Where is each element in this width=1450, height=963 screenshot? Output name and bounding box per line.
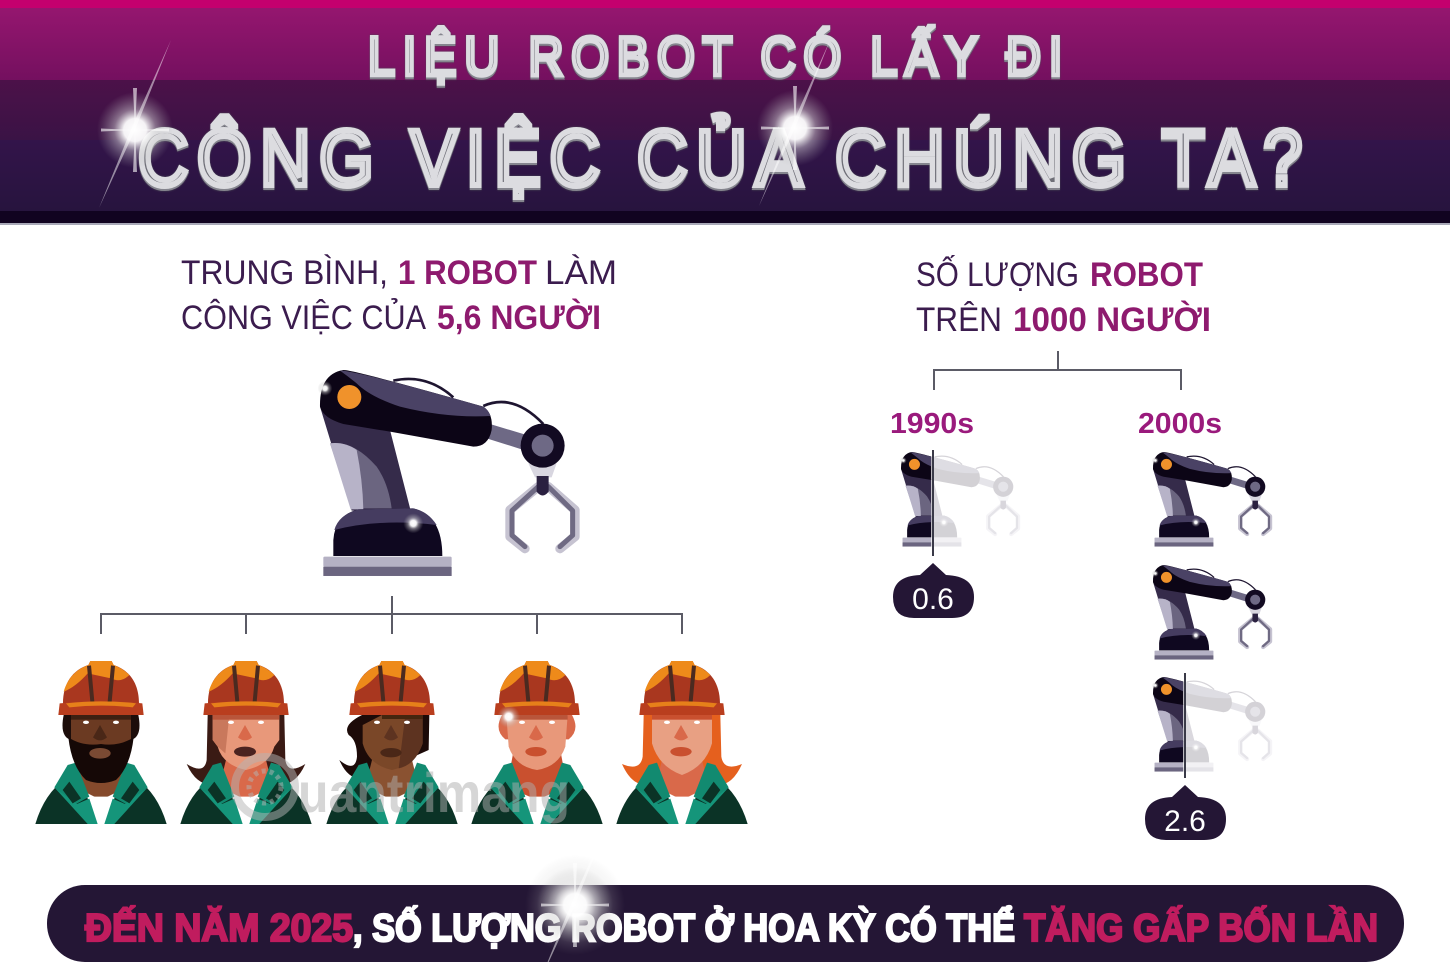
icon: worker 5 (616, 661, 748, 824)
footer text: , SỐ LƯỢNG ROBOT Ở HOA KỲ CÓ THỂ (353, 905, 1015, 950)
title line 2: CÔNG VIỆC CỦA CHÚNG TA? (138, 114, 1302, 202)
title sparkles (97, 38, 833, 208)
callout: 2.6 (1145, 785, 1226, 840)
icon: worker 1 (35, 661, 167, 824)
footer text: TĂNG GẤP BỐN LẦN (1024, 905, 1378, 950)
footer text (85, 905, 1378, 950)
callout: 0.6 (893, 563, 974, 618)
left heading: 5,6 NGƯỜI (437, 299, 601, 337)
footer pill (47, 885, 1404, 962)
icon: partial robot 2000s (1152, 673, 1270, 778)
connector: robot to workers (101, 596, 682, 634)
header banner (0, 0, 1450, 225)
title line 1: LIỆU ROBOT CÓ LẤY ĐI (368, 25, 1062, 87)
watermark: uantrimang (298, 761, 570, 824)
footer sparkle (525, 815, 625, 963)
right heading (916, 255, 1211, 339)
right heading: ROBOT (1090, 256, 1203, 294)
right heading: SỐ LƯỢNG (916, 255, 1079, 294)
right heading: TRÊN (916, 301, 1002, 339)
icon: robot 2000s middle (1152, 565, 1270, 660)
label: 2000s: 2000s (1138, 408, 1222, 440)
icon: robot 2000s top (1152, 452, 1270, 547)
callout: 2.6: 2.6 (1164, 805, 1206, 838)
callout: 0.6: 0.6 (912, 583, 954, 616)
icon: large robot arm (318, 370, 575, 576)
left heading: 1 ROBOT (398, 254, 537, 292)
left heading: CÔNG VIỆC CỦA (181, 299, 426, 337)
icon: worker 4 (471, 661, 603, 824)
left heading: LÀM (545, 254, 617, 292)
left heading: TRUNG BÌNH, (181, 254, 388, 292)
footer text: ĐẾN NĂM 2025 (85, 906, 353, 950)
watermark (235, 757, 570, 824)
left heading (181, 254, 617, 337)
label: 1990s: 1990s (890, 408, 974, 440)
icon: partial robot 1990s (900, 450, 1018, 556)
connector: robot density (934, 351, 1181, 390)
icon: worker 3 (326, 661, 458, 824)
right heading: 1000 NGƯỜI (1013, 301, 1211, 339)
icon: worker 2 (180, 661, 312, 824)
